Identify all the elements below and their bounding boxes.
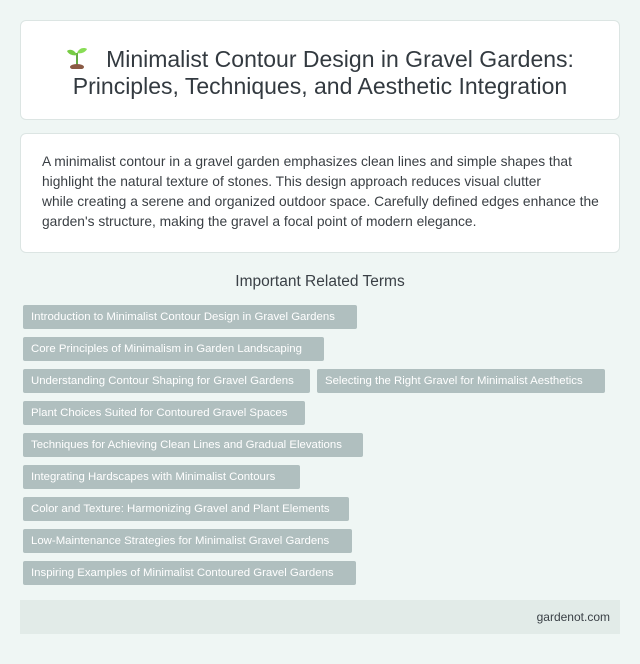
tag 3 <box>23 369 310 393</box>
description card <box>20 133 620 253</box>
tag 8 <box>23 497 349 521</box>
description text <box>42 154 599 229</box>
description text: while creating a serene and organized outdoor space. Carefully defined edges enhance the <box>42 194 599 209</box>
description text: A minimalist contour in a gravel garden emphasizes clean lines and simple shapes that <box>42 154 572 169</box>
tag 4: Selecting the Right Gravel for Minimalist Aesthetics <box>325 375 583 387</box>
tag 10 <box>23 561 356 585</box>
icon: sprout <box>67 48 87 69</box>
description text: garden's structure, making the gravel a focal point of modern elegance. <box>42 214 476 229</box>
tag 8: Color and Texture: Harmonizing Gravel and Plant Elements <box>31 503 330 515</box>
tag 4 <box>317 369 605 393</box>
tag 2 <box>23 337 324 361</box>
tag 6 <box>23 433 363 457</box>
tag 5: Plant Choices Suited for Contoured Gravel Spaces <box>31 407 287 419</box>
heading: related terms: Important Related Terms <box>235 273 405 290</box>
tag 5 <box>23 401 305 425</box>
description text: highlight the natural texture of stones. This design approach reduces visual clutter <box>42 174 541 189</box>
footer credit: gardenot.com <box>537 610 610 624</box>
tag 6: Techniques for Achieving Clean Lines and Gradual Elevations <box>31 439 342 451</box>
tag 2: Core Principles of Minimalism in Garden Landscaping <box>31 343 302 355</box>
tag 9 <box>23 529 352 553</box>
tag 7 <box>23 465 300 489</box>
tags list <box>23 305 605 585</box>
tag 3: Understanding Contour Shaping for Gravel Gardens <box>31 375 294 387</box>
tag 10: Inspiring Examples of Minimalist Contoured Gravel Gardens <box>31 567 334 579</box>
title card <box>20 20 620 120</box>
tag 9: Low-Maintenance Strategies for Minimalist Gravel Gardens <box>31 535 329 547</box>
tag 1: Introduction to Minimalist Contour Design in Gravel Gardens <box>31 311 335 323</box>
footer <box>20 600 620 634</box>
tag 7: Integrating Hardscapes with Minimalist Contours <box>31 471 275 483</box>
title: Minimalist Contour Design in Gravel Gardens: Principles, Techniques, and Aesthetic Integration <box>73 46 574 99</box>
tag 1 <box>23 305 357 329</box>
